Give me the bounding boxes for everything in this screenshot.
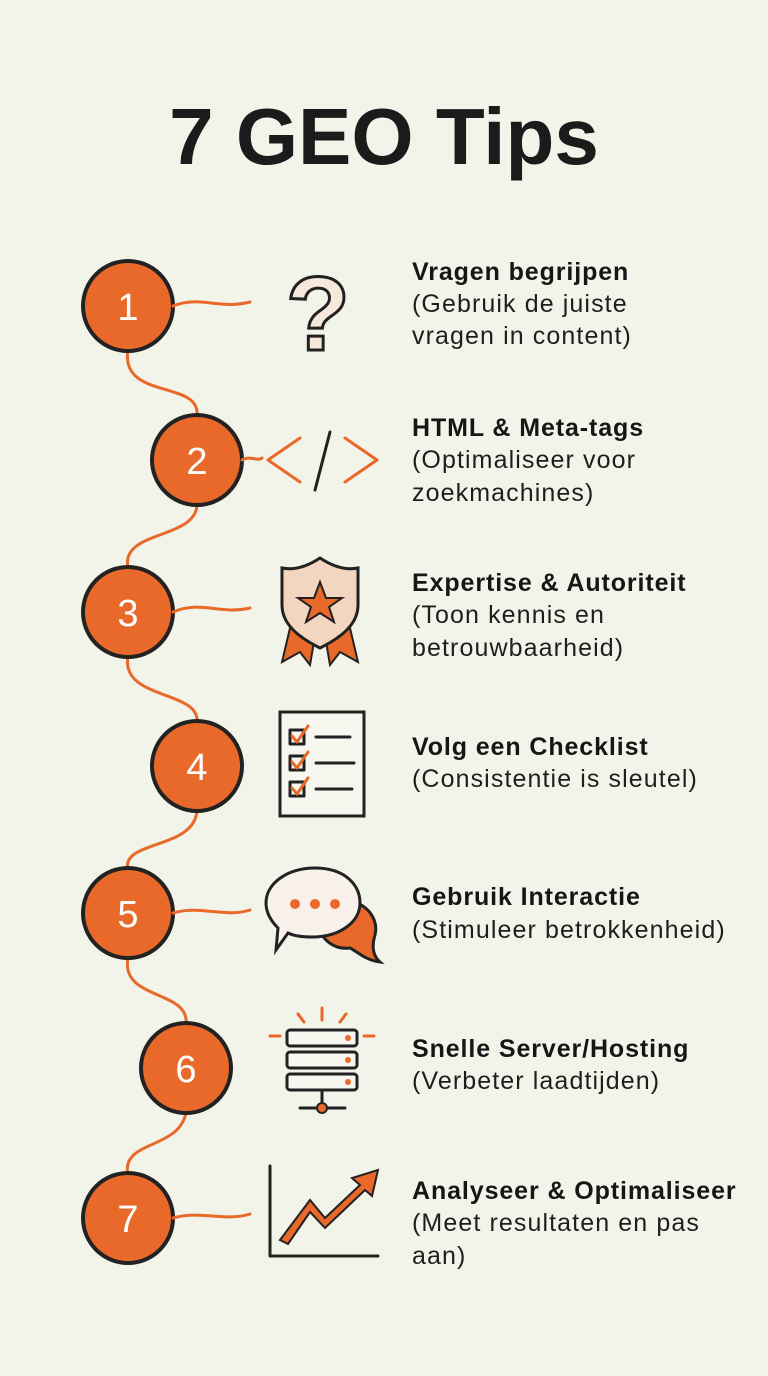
step 5 bbox=[83, 868, 250, 958]
text 6: (Verbeter laadtijden) bbox=[412, 1067, 660, 1095]
step 6: 6 bbox=[175, 1049, 197, 1091]
title: 7 GEO Tips bbox=[169, 92, 599, 181]
icon: growth chart bbox=[270, 1166, 378, 1256]
step 1: 1 bbox=[117, 287, 139, 329]
text 3: (Toon kennis en bbox=[412, 601, 605, 629]
step 3: 3 bbox=[117, 593, 139, 635]
text 5: Gebruik Interactie bbox=[412, 883, 641, 911]
step 6 bbox=[141, 1023, 231, 1113]
icon: checklist bbox=[280, 712, 364, 816]
text 6 bbox=[412, 1035, 689, 1095]
text 1 bbox=[412, 258, 632, 350]
text 1: (Gebruik de juiste bbox=[412, 290, 628, 318]
text 3: betrouwbaarheid) bbox=[412, 634, 624, 662]
text 4: (Consistentie is sleutel) bbox=[412, 765, 698, 793]
step 4 bbox=[152, 721, 242, 811]
text 2: zoekmachines) bbox=[412, 479, 594, 507]
icon: server bbox=[270, 1008, 374, 1113]
step 3 bbox=[83, 567, 250, 657]
text 3: Expertise & Autoriteit bbox=[412, 569, 686, 597]
step 7 bbox=[83, 1173, 250, 1263]
text 3 bbox=[412, 569, 686, 662]
icon: chat bubbles bbox=[266, 868, 380, 962]
text 2: HTML & Meta-tags bbox=[412, 414, 644, 442]
step 2 bbox=[152, 415, 262, 505]
text 5: (Stimuleer betrokkenheid) bbox=[412, 916, 726, 944]
text 1: Vragen begrijpen bbox=[412, 258, 629, 286]
step 7: 7 bbox=[117, 1199, 139, 1241]
text 6: Snelle Server/Hosting bbox=[412, 1035, 689, 1063]
text 7: aan) bbox=[412, 1242, 466, 1270]
text 2 bbox=[412, 414, 644, 507]
text 7: Analyseer & Optimaliseer bbox=[412, 1177, 737, 1205]
icon: code bbox=[268, 432, 377, 490]
icon: shield badge bbox=[282, 558, 358, 665]
connector path bbox=[127, 350, 197, 1175]
text 1: vragen in content) bbox=[412, 322, 632, 350]
text 4 bbox=[412, 733, 698, 793]
text 7 bbox=[412, 1177, 737, 1270]
text 5 bbox=[412, 883, 726, 944]
step 4: 4 bbox=[186, 747, 208, 789]
text 7: (Meet resultaten en pas bbox=[412, 1209, 700, 1237]
step 5: 5 bbox=[117, 894, 139, 936]
text 2: (Optimaliseer voor bbox=[412, 446, 636, 474]
step 1 bbox=[83, 261, 250, 351]
text 4: Volg een Checklist bbox=[412, 733, 649, 761]
step 2: 2 bbox=[186, 441, 208, 483]
icon: question mark: ? bbox=[286, 256, 350, 373]
